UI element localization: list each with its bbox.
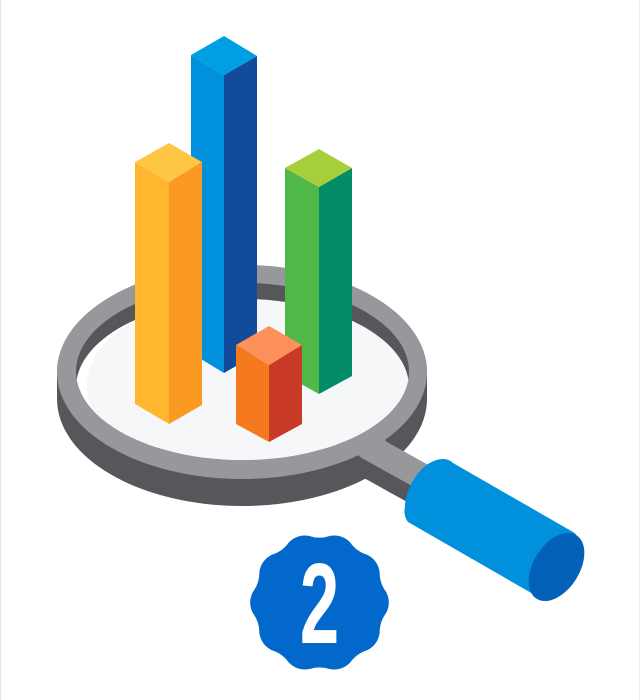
bar chart (135, 36, 352, 442)
handle neck: dark underside (345, 445, 432, 508)
bar: orange short (236, 326, 302, 442)
ring: dark inner wall (76, 283, 409, 460)
bar: green (285, 149, 352, 394)
bar: yellow (135, 143, 202, 424)
ring: dark outer side wall (57, 265, 427, 506)
magnifying glass (57, 265, 596, 611)
badge: scalloped background (250, 536, 389, 669)
number badge (250, 536, 389, 669)
handle end cap (517, 523, 596, 611)
handle neck: light top face (350, 432, 432, 486)
ring: light top face (57, 265, 427, 479)
badge: number 2: 2 (300, 541, 339, 668)
handle grip (404, 459, 578, 598)
bar: blue tall (191, 36, 257, 373)
glass surface (76, 299, 408, 460)
